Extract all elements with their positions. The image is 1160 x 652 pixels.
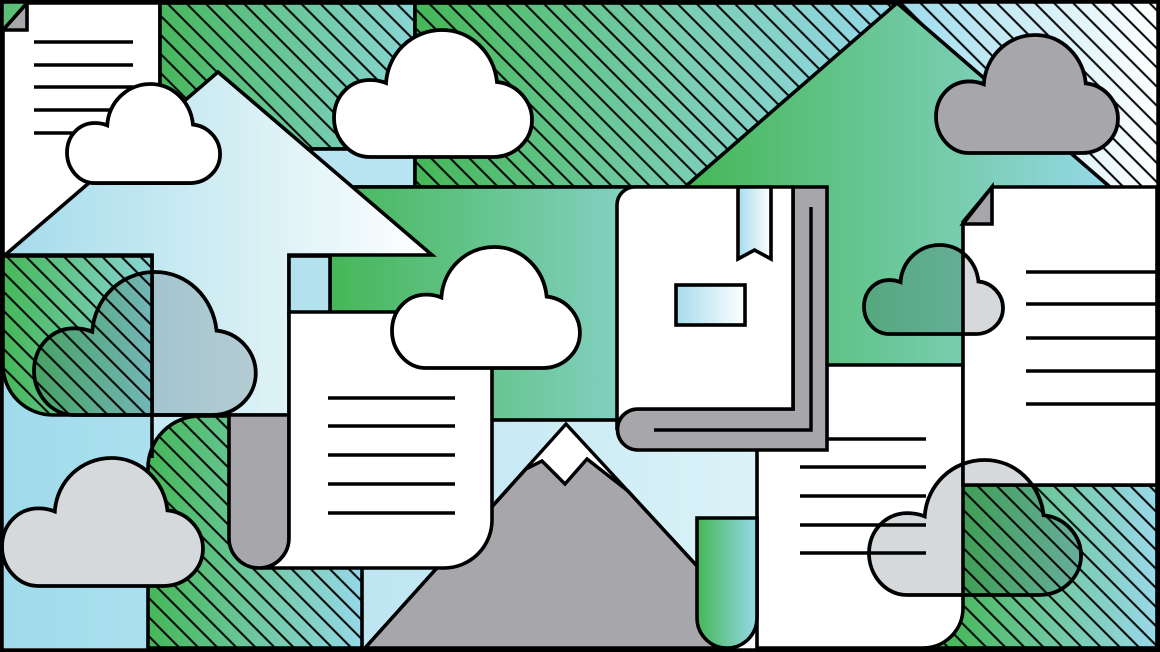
icon: mountain (365, 424, 727, 648)
icon: bookmark (738, 187, 771, 259)
panel: pale blue block (300, 149, 415, 187)
panel: top-left document (3, 3, 160, 260)
document: right lower page (727, 365, 963, 648)
panel: hatched top panel centre (415, 3, 905, 187)
icon: book (617, 187, 827, 450)
book label (676, 285, 745, 325)
document: centre scroll (229, 312, 492, 568)
panel: bottom right hatched block (930, 485, 1157, 648)
panel: bottom sky (3, 340, 760, 648)
cloud: white centre (392, 247, 580, 368)
panel: rounded hatched bottom block (148, 415, 362, 648)
panel: small blue square (289, 256, 330, 316)
cloud: translucent left (34, 272, 256, 415)
icon: green test tube (697, 518, 757, 648)
cloud: white top centre (334, 30, 532, 157)
arrow: large pale blue up arrow (5, 72, 432, 415)
cloud: pale grey bottom left (2, 458, 203, 586)
panel: hatched top panel left (160, 3, 415, 149)
panel: rounded hatched left block (3, 256, 152, 415)
cloud: grey top right (936, 35, 1118, 153)
document: right upper page (963, 187, 1157, 485)
arrow: green upward house shape (685, 3, 1110, 400)
cloud: translucent right middle (864, 245, 1003, 334)
panel: pale corner (152, 415, 232, 465)
cloud: translucent bottom right (869, 460, 1081, 595)
panel: central green block (330, 187, 630, 420)
panel: hatched top panel right (897, 3, 1157, 187)
cloud: white top left (67, 84, 220, 183)
